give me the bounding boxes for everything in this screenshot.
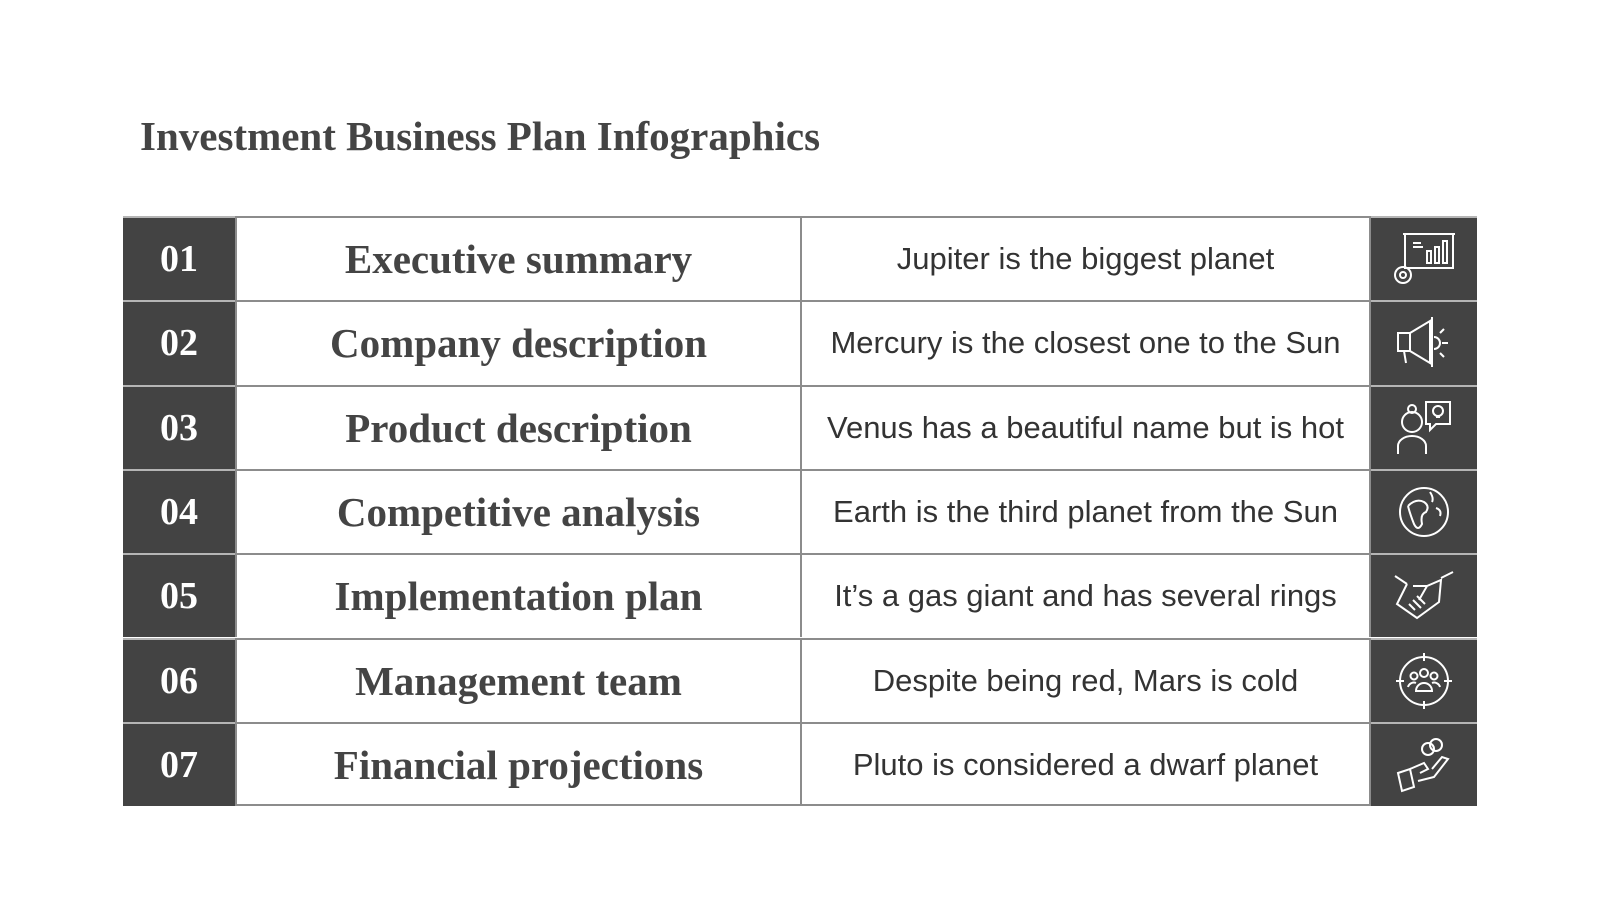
row 05: Implementation plan [335,573,702,619]
icon: globe [1371,469,1477,553]
row 03 [123,385,1477,469]
icon: person with idea [1371,385,1477,469]
row 04: 04 [160,491,198,533]
title: Investment Business Plan Infographics [140,113,820,159]
row 06: 06 [160,660,198,702]
row 05: It’s a gas giant and has several rings [834,578,1337,613]
row 06 [123,638,1477,722]
row 07: Financial projections [334,742,703,788]
row 02: Company description [330,320,707,366]
row 01 [123,216,1477,300]
row 07: Pluto is considered a dwarf planet [853,747,1318,782]
row 03: Venus has a beautiful name but is hot [827,410,1344,445]
row 02 [123,300,1477,385]
row 01: Jupiter is the biggest planet [897,241,1274,276]
row 07 [123,722,1477,806]
row 04: Competitive analysis [337,489,700,535]
row 04: Earth is the third planet from the Sun [833,494,1338,529]
icon: team target [1371,638,1477,722]
row 03: Product description [345,405,692,451]
row 04 [123,469,1477,553]
row 02: 02 [160,322,198,364]
row 03: 03 [160,407,198,449]
icon: megaphone [1371,300,1477,385]
row 06: Management team [355,658,682,704]
row 01: Executive summary [345,236,692,282]
icon: presentation chart [1371,216,1477,300]
row 01: 01 [160,238,198,280]
icon: handshake [1371,553,1477,637]
icon: hand with coins [1371,722,1477,806]
row 05: 05 [160,575,198,617]
table [123,216,1477,806]
row 02: Mercury is the closest one to the Sun [830,325,1341,360]
row 07: 07 [160,744,198,786]
row 05 [123,553,1477,637]
row 06: Despite being red, Mars is cold [873,663,1298,698]
